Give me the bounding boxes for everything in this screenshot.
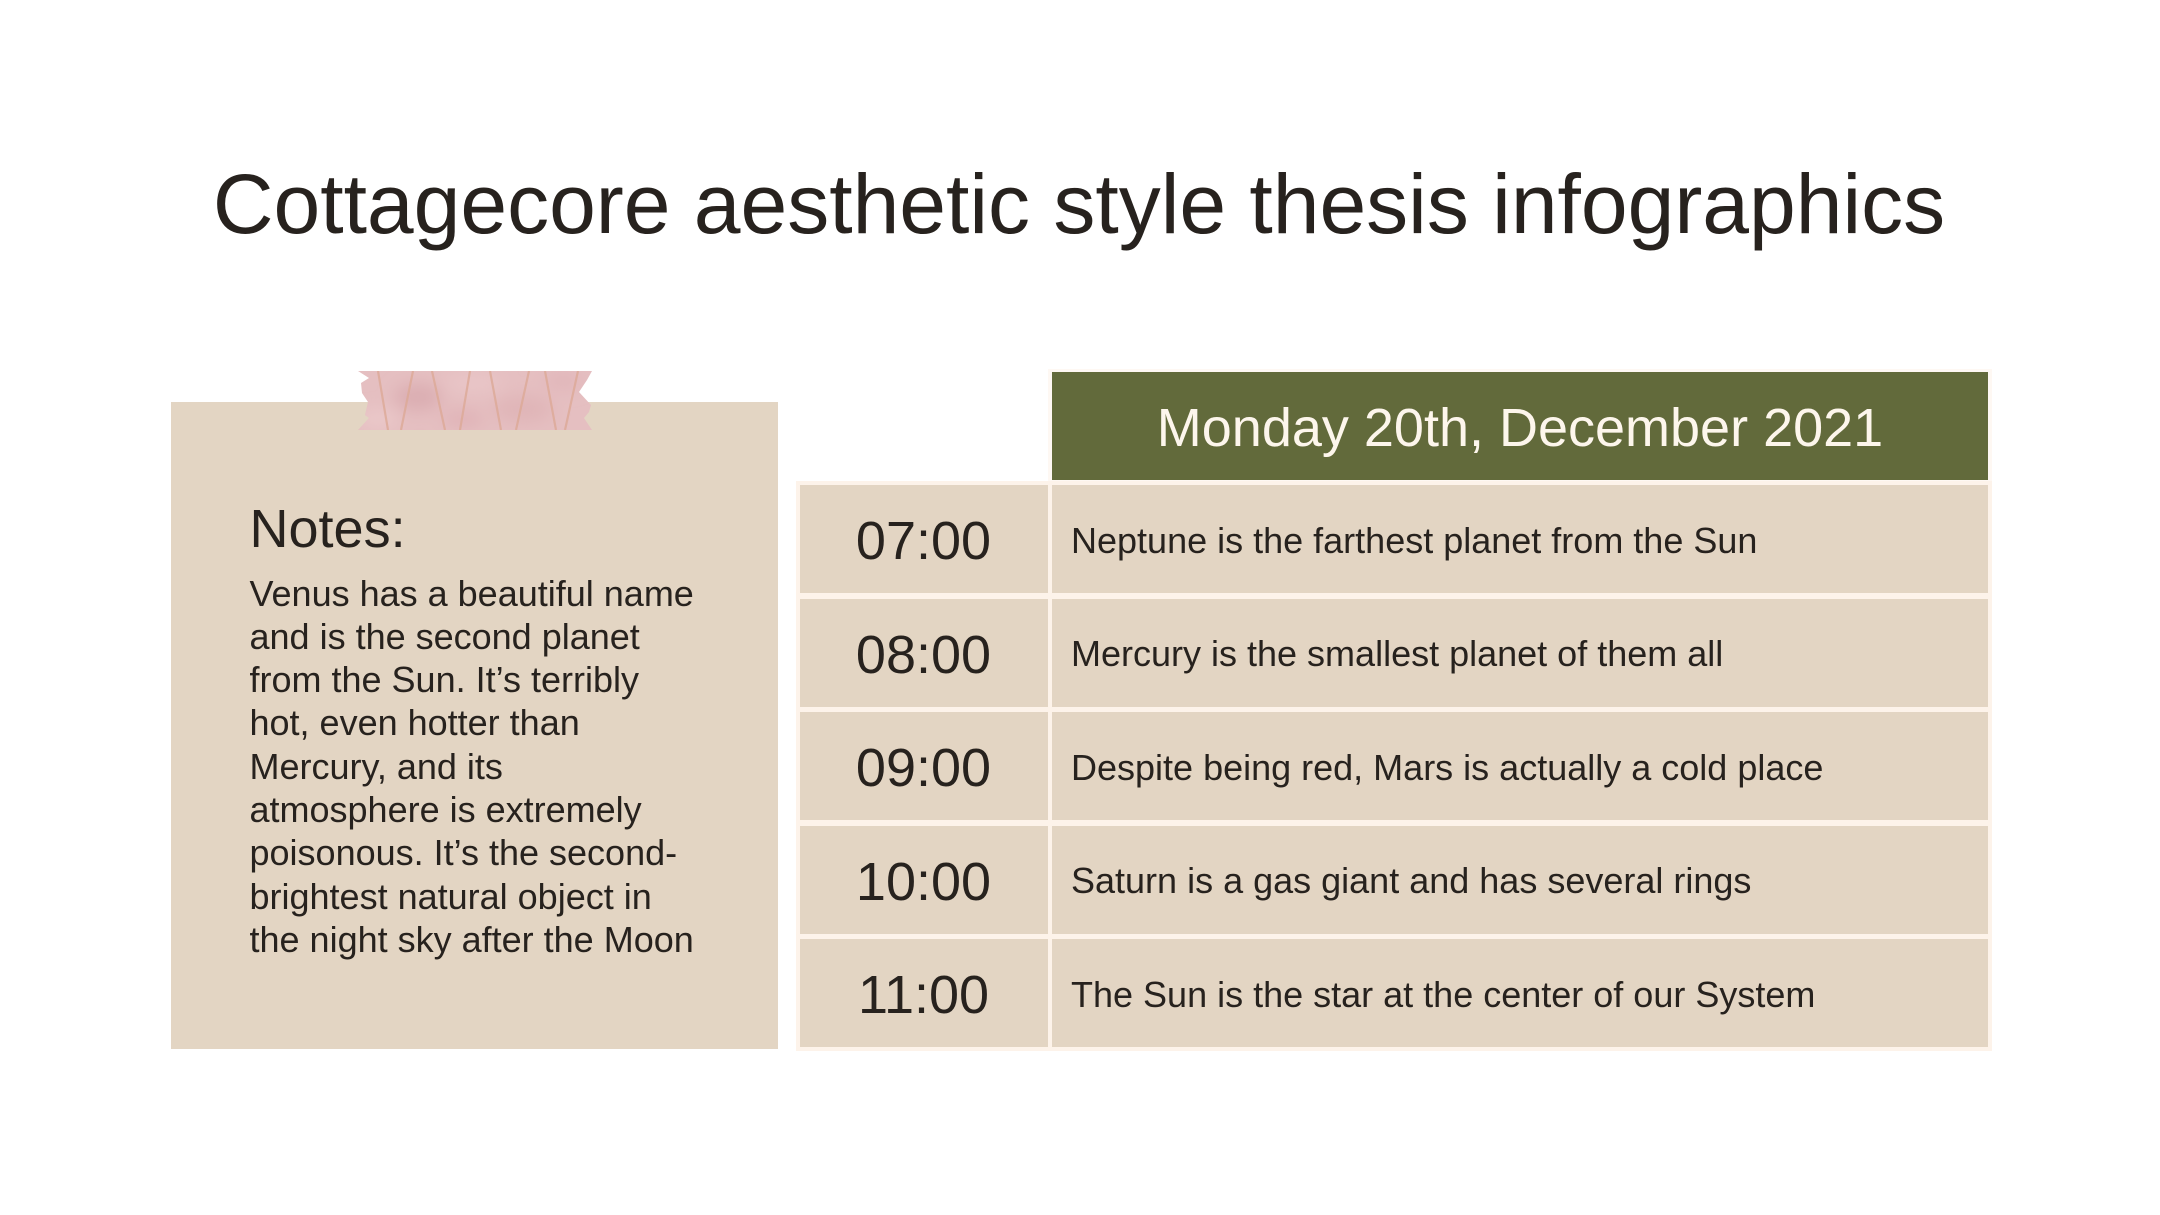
header frame [1048, 369, 1992, 481]
notes heading: Notes: [250, 498, 406, 558]
notes text: from the Sun. It’s terribly [250, 659, 639, 700]
header: date [1052, 372, 1988, 480]
notes text: and is the second planet [250, 616, 640, 657]
notes text: the night sky after the Moon [250, 919, 694, 960]
description 10:00: Saturn is a gas giant and has several rings [1071, 860, 1751, 901]
notes text: hot, even hotter than [250, 702, 580, 743]
time 07:00: 07:00 [856, 511, 991, 571]
description 10:00 [1052, 826, 1988, 934]
notes text: atmosphere is extremely [250, 789, 642, 830]
notes text [250, 572, 694, 960]
description 07:00 [1052, 485, 1988, 593]
time 11:00 [800, 939, 1048, 1047]
time 10:00: 10:00 [856, 852, 991, 912]
notes text: Venus has a beautiful name [250, 572, 694, 614]
description 09:00: Despite being red, Mars is actually a cold place [1071, 747, 1823, 788]
header: date: Monday 20th, December 2021 [1157, 398, 1883, 458]
notes text: brightest natural object in [250, 876, 652, 917]
time 09:00 [800, 712, 1048, 820]
description 08:00: Mercury is the smallest planet of them all [1071, 633, 1723, 674]
time 08:00: 08:00 [856, 625, 991, 685]
description 08:00 [1052, 598, 1988, 707]
time 09:00: 09:00 [856, 738, 991, 798]
title: Cottagecore aesthetic style thesis infographics [213, 157, 1945, 251]
time 07:00 [800, 485, 1048, 593]
icon: washi tape [358, 371, 592, 430]
notes text: poisonous. It’s the second- [250, 832, 677, 873]
description 09:00 [1052, 712, 1988, 820]
panel: notes [171, 402, 778, 1049]
description 07:00: Neptune is the farthest planet from the Sun [1071, 520, 1757, 561]
time 10:00 [800, 826, 1048, 934]
time 08:00 [800, 598, 1048, 707]
description 11:00 [1052, 939, 1988, 1047]
table frame [796, 481, 1992, 1051]
notes text: Mercury, and its [250, 746, 503, 787]
time 11:00: 11:00 [858, 965, 989, 1025]
description 11:00: The Sun is the star at the center of our System [1071, 974, 1815, 1015]
